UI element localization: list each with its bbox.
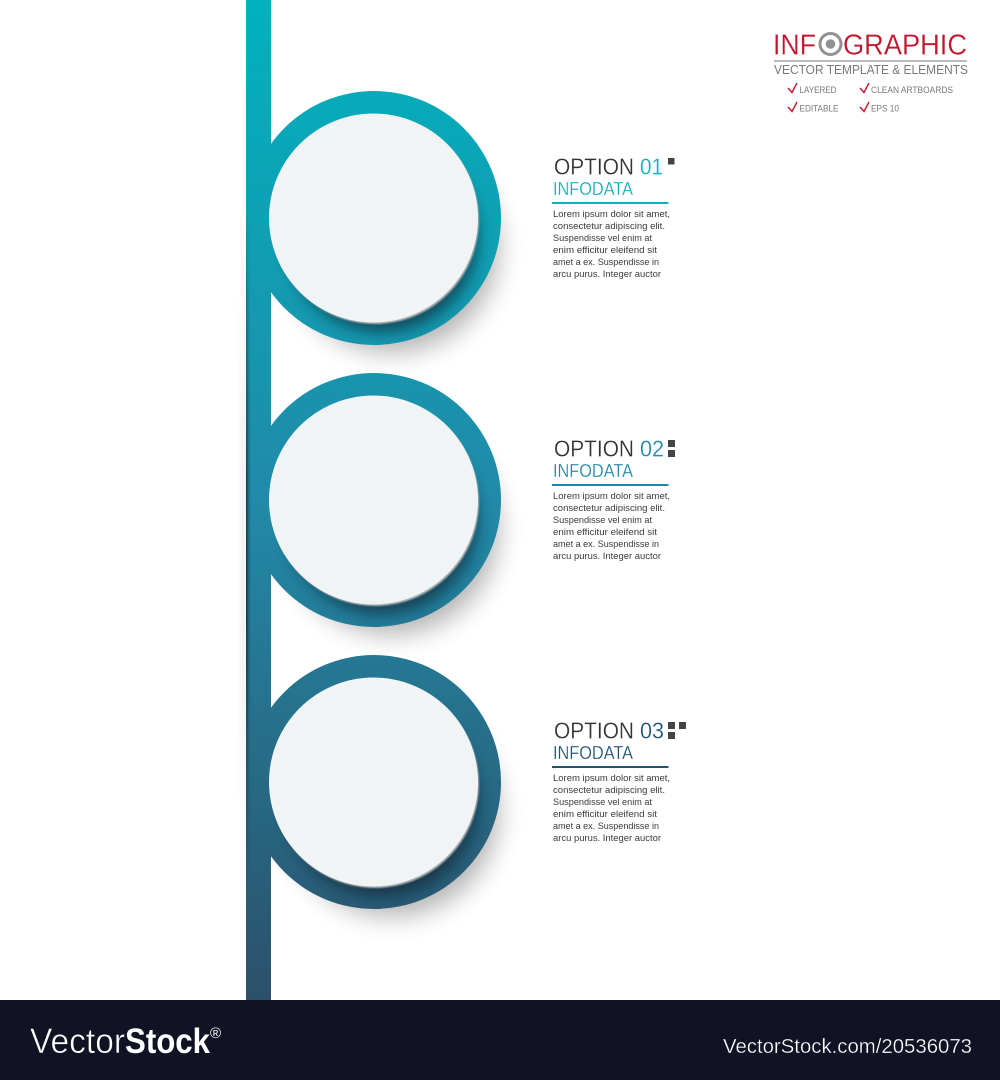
panel: option 02: OPTION	[554, 436, 634, 462]
panel: option 01: Lorem ipsum dolor sit amet,	[553, 209, 670, 220]
panel: option 01: OPTION	[554, 154, 634, 180]
panel: option 01: arcu purus. Integer auctor	[553, 269, 662, 280]
panel: option 02: Lorem ipsum dolor sit amet,	[553, 491, 670, 502]
panel: option 01: consectetur adipiscing elit.	[553, 221, 665, 232]
panel: option 03: 03	[640, 718, 664, 744]
panel: option 03: consectetur adipiscing elit.	[553, 785, 665, 796]
bar left-edge shading	[246, 226, 250, 862]
panel: option 02	[552, 436, 675, 562]
panel: option 02: Suspendisse vel enim at	[553, 515, 652, 526]
panel: option 02: enim efficitur eleifend sit	[553, 527, 657, 538]
panel: option 02: INFODATA	[553, 461, 633, 481]
circle 1	[247, 91, 501, 345]
panel: option 02: 02	[640, 436, 664, 462]
panel: option 03	[552, 718, 686, 844]
circle 2	[247, 373, 501, 627]
feature checklist: LAYERED	[800, 85, 837, 95]
panel: option 01	[552, 154, 674, 280]
panel: option 03: enim efficitur eleifend sit	[553, 809, 657, 820]
panel: option 03: Suspendisse vel enim at	[553, 797, 652, 808]
footer logo: VectorStock: Vector	[30, 1022, 125, 1061]
footer logo: VectorStock	[30, 1022, 221, 1061]
panel: option 03: Lorem ipsum dolor sit amet,	[553, 773, 670, 784]
footer logo: VectorStock: ®	[210, 1025, 221, 1042]
panel: option 03: amet a ex. Suspendisse in	[553, 821, 659, 832]
drop shadows under rings	[286, 140, 498, 916]
panel: option 01: enim efficitur eleifend sit	[553, 245, 657, 256]
panel: option 01: 01	[640, 154, 663, 180]
circle 3	[247, 655, 501, 909]
panel: option 03: INFODATA	[553, 743, 633, 763]
panel: option 03: arcu purus. Integer auctor	[553, 833, 662, 844]
feature checklist: EDITABLE	[800, 104, 838, 114]
footer image id: VectorStock.com/20536073	[723, 1035, 972, 1058]
panel: option 02: consectetur adipiscing elit.	[553, 503, 665, 514]
panel: option 03: OPTION	[554, 718, 634, 744]
panel: option 01: amet a ex. Suspendisse in	[553, 257, 659, 268]
header logo: infographic: GRAPHIC	[843, 30, 967, 62]
icon: target letter O	[820, 34, 841, 54]
panel: option 02: amet a ex. Suspendisse in	[553, 539, 659, 550]
feature checklist: EPS 10	[871, 104, 899, 114]
panel: option 01: INFODATA	[553, 179, 633, 199]
panel: option 02: arcu purus. Integer auctor	[553, 551, 662, 562]
footer bar	[0, 1000, 1000, 1080]
vertical timeline bar	[241, 0, 271, 1000]
footer logo: VectorStock: Stock	[125, 1022, 210, 1061]
header logo: infographic: VECTOR TEMPLATE & ELEMENTS	[774, 63, 968, 77]
feature checklist	[788, 83, 953, 114]
header logo: infographic	[773, 30, 968, 77]
header logo: infographic: INF	[773, 30, 816, 62]
feature checklist: CLEAN ARTBOARDS	[871, 85, 953, 95]
panel: option 01: Suspendisse vel enim at	[553, 233, 652, 244]
